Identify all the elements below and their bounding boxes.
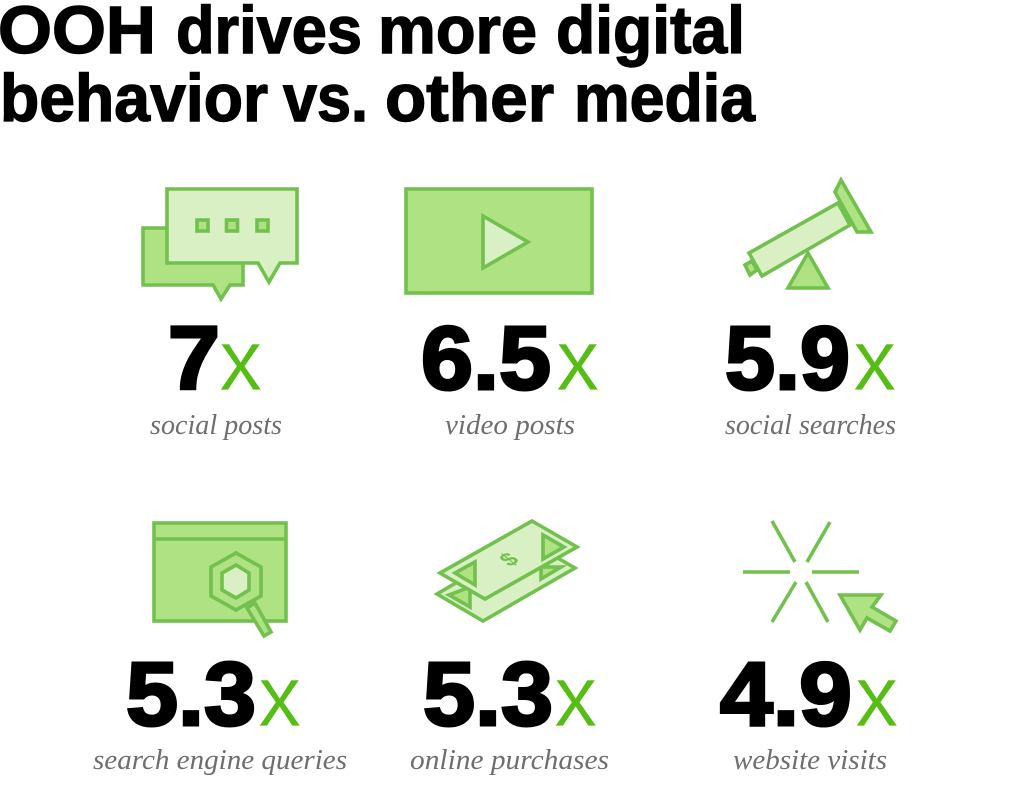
stat: 6.5x: x [556,312,600,409]
caption: social posts: social posts [150,410,282,441]
stat: 7x: x [219,312,262,409]
stat: 7x [168,309,262,409]
panel: social searches [725,180,896,441]
stat: 5.9x: x [853,312,896,409]
stat: 5.3x: 5.3 [423,645,553,745]
panel: video posts [406,189,600,441]
dollar sign: $ [494,548,525,570]
title: media [574,61,756,136]
icon: browser with magnifier [154,523,286,636]
icon: cursor click [743,521,896,631]
title [0,0,756,136]
icon: chat bubbles [143,189,297,299]
stat: 6.5x: 6.5 [421,309,551,409]
panel: search engine queries [93,523,347,776]
icon: video player [406,189,592,293]
title: vs. [283,61,368,136]
stat: 5.3x: x [554,648,598,745]
stat: 4.9x: x [855,648,898,745]
caption: video posts: video posts [445,410,575,441]
stat: 5.9x: 5.9 [725,309,850,409]
caption: search engine queries: search engine queries [93,745,347,776]
title: behavior [0,61,268,136]
caption: online purchases: online purchases [410,745,609,776]
stat: 5.3x: x [258,648,302,745]
panel: website visits [720,521,898,776]
stat: 7x: 7 [168,309,220,409]
panel: social posts [143,189,297,441]
icon: telescope [745,180,871,288]
caption: website visits: website visits [733,745,887,776]
panel: online purchases [410,521,609,776]
caption: social searches: social searches [725,410,896,441]
stat: 4.9x: 4.9 [720,645,852,745]
stat: 5.3x: 5.3 [126,645,256,745]
icon: dollar bills [437,521,577,621]
title: other [385,61,554,136]
